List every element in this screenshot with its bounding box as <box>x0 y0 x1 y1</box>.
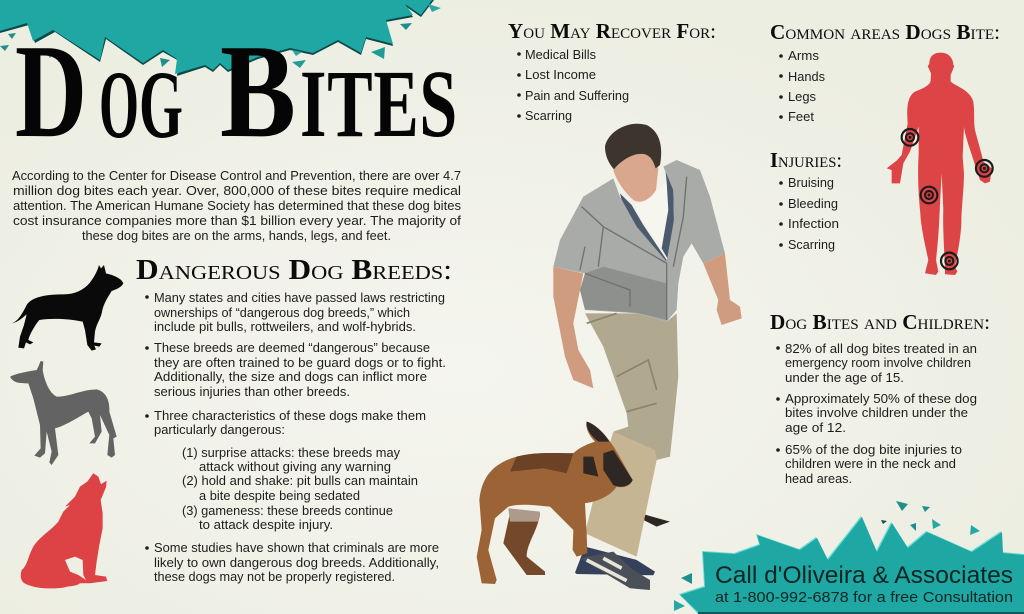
text block: dangerous breeds bullets <box>145 290 446 584</box>
list: common areas: Arms <box>788 48 819 63</box>
text block: dangerous breeds bullets: they are often trained to be guard dogs or to fight. <box>154 355 446 370</box>
text block: dangerous breeds bullets: (3) gameness: these breeds continue <box>182 503 393 518</box>
text block: dangerous breeds bullets: attack without giving any warning <box>199 459 391 474</box>
man's face <box>613 152 658 202</box>
title: Dog Bites: G <box>139 51 183 158</box>
text block: children stats: age of 12. <box>785 420 846 435</box>
list: injuries: Scarring <box>788 237 835 252</box>
shoes <box>575 547 655 590</box>
title: Dog Bites <box>15 17 458 165</box>
heading: You May Recover For: You May Recover For: <box>508 19 716 43</box>
text block: dangerous breeds bullets: particularly dangerous: <box>154 422 285 437</box>
text block: children stats <box>776 341 977 486</box>
list: injuries: Bruising <box>788 175 834 190</box>
man's hoodie <box>553 160 725 322</box>
dog <box>477 422 633 584</box>
list: injuries: Bleeding <box>788 196 838 211</box>
list: recover for: Medical Bills <box>525 47 596 62</box>
dog's far rear leg <box>503 513 545 575</box>
text block: children stats: emergency room involve children <box>785 355 971 370</box>
text block: children stats: children were in the neck and <box>785 456 956 471</box>
text block: dangerous breeds bullets: likely to own dangerous dog breeds. Additionally, <box>154 555 439 570</box>
intro paragraph: cost insurance companies more than $1 billion every year. The majority of <box>13 214 462 228</box>
list: common areas: Feet <box>788 109 814 124</box>
banner: top teal torn shape <box>0 0 441 76</box>
text block: dangerous breeds bullets: a bite despite being sedated <box>199 488 360 503</box>
banner: call to action <box>674 501 1024 614</box>
icon: black pit bull silhouette <box>10 265 123 351</box>
text block: dangerous breeds bullets: ownerships of “dangerous dog breeds,” which <box>154 305 410 320</box>
text block: dangerous breeds bullets: These breeds are deemed “dangerous” because <box>154 340 430 355</box>
list: recover for: Scarring <box>525 108 572 123</box>
banner text: Call d'Oliveira & Associates <box>715 562 1013 589</box>
banner text: at 1-800-992-6878 for a free Consultation <box>715 589 1013 606</box>
banner text <box>715 562 1013 606</box>
intro paragraph: According to the Center for Disease Control and Prevention, there are over 4.7 <box>12 169 461 183</box>
man's trousers <box>585 313 678 513</box>
heading: Common areas Dogs Bite: Common areas Dogs Bite: <box>770 20 1000 44</box>
text block: dangerous breeds bullets: Additionally, the size and dogs can inflict more <box>154 369 427 384</box>
heading: Injuries: Injuries: <box>770 148 842 172</box>
list: common areas: Legs <box>788 89 816 104</box>
icon: grey dog silhouette <box>10 361 117 465</box>
man's hair <box>605 124 661 169</box>
man's shirt <box>633 180 668 250</box>
text block: children stats: bites involve children under the <box>785 405 968 420</box>
text block: dangerous breeds bullets: (1) surprise attacks: these breeds may <box>182 445 400 460</box>
intro paragraph: attention. The American Humane Society has determined that these dog bites <box>13 199 461 213</box>
text block: dangerous breeds bullets: include pit bulls, rottweilers, and wolf-hybrids. <box>154 319 416 334</box>
list: recover for: Pain and Suffering <box>525 88 629 103</box>
list: injuries: Infection <box>788 216 839 231</box>
text block: children stats: 82% of all dog bites treated in an <box>785 341 977 356</box>
list: recover for <box>517 47 629 123</box>
dog's muzzle, ear and dark back <box>583 422 633 487</box>
title: Dog Bites: ITES <box>300 50 458 157</box>
heading: Dog Bites and Children: Dog Bites and Children: <box>770 310 990 334</box>
dog's far paw <box>640 513 670 527</box>
intro paragraph: these dog bites are on the arms, hands, legs, and feet. <box>82 229 391 243</box>
title: Dog Bites: B <box>220 17 296 165</box>
text block: children stats: under the age of 15. <box>785 370 904 385</box>
text block: children stats: Approximately 50% of these dog <box>785 391 977 406</box>
heading: Dangerous Dog Breeds: Dangerous Dog Breeds: <box>136 255 452 286</box>
icon: red body figure with bite targets <box>887 53 993 275</box>
dog's belly shadow <box>508 508 540 522</box>
text block: children stats: 65% of the dog bite injuries to <box>785 442 962 457</box>
text block: dangerous breeds bullets: Many states and cities have passed laws restricting <box>154 290 445 305</box>
photo illustration: man with dog biting padded sleeve <box>477 124 742 590</box>
list: injuries <box>779 175 839 252</box>
icon: red howling wolf silhouette <box>21 473 107 588</box>
list: common areas: Hands <box>788 69 825 84</box>
list: common areas <box>779 48 825 124</box>
title: Dog Bites: O <box>99 51 139 158</box>
text block: dangerous breeds bullets: Some studies have shown that criminals are more <box>154 540 439 555</box>
text block: dangerous breeds bullets: serious injuries than other breeds. <box>154 384 350 399</box>
list: recover for: Lost Income <box>525 67 596 82</box>
title: Dog Bites: D <box>15 17 87 165</box>
intro paragraph <box>12 169 462 243</box>
text block: children stats: head areas. <box>785 471 852 486</box>
man's arms <box>553 253 742 388</box>
text block: dangerous breeds bullets: Three characteristics of these dogs make them <box>154 408 426 423</box>
intro paragraph: million dog bites each year. Over, 800,000 of these bites require medical <box>13 184 461 198</box>
text block: dangerous breeds bullets: (2) hold and shake: pit bulls can maintain <box>182 473 418 488</box>
text block: dangerous breeds bullets: to attack despite injury. <box>199 517 333 532</box>
padded jute sleeve <box>585 432 657 557</box>
text block: dangerous breeds bullets: these dogs may not be properly registered. <box>154 569 395 584</box>
